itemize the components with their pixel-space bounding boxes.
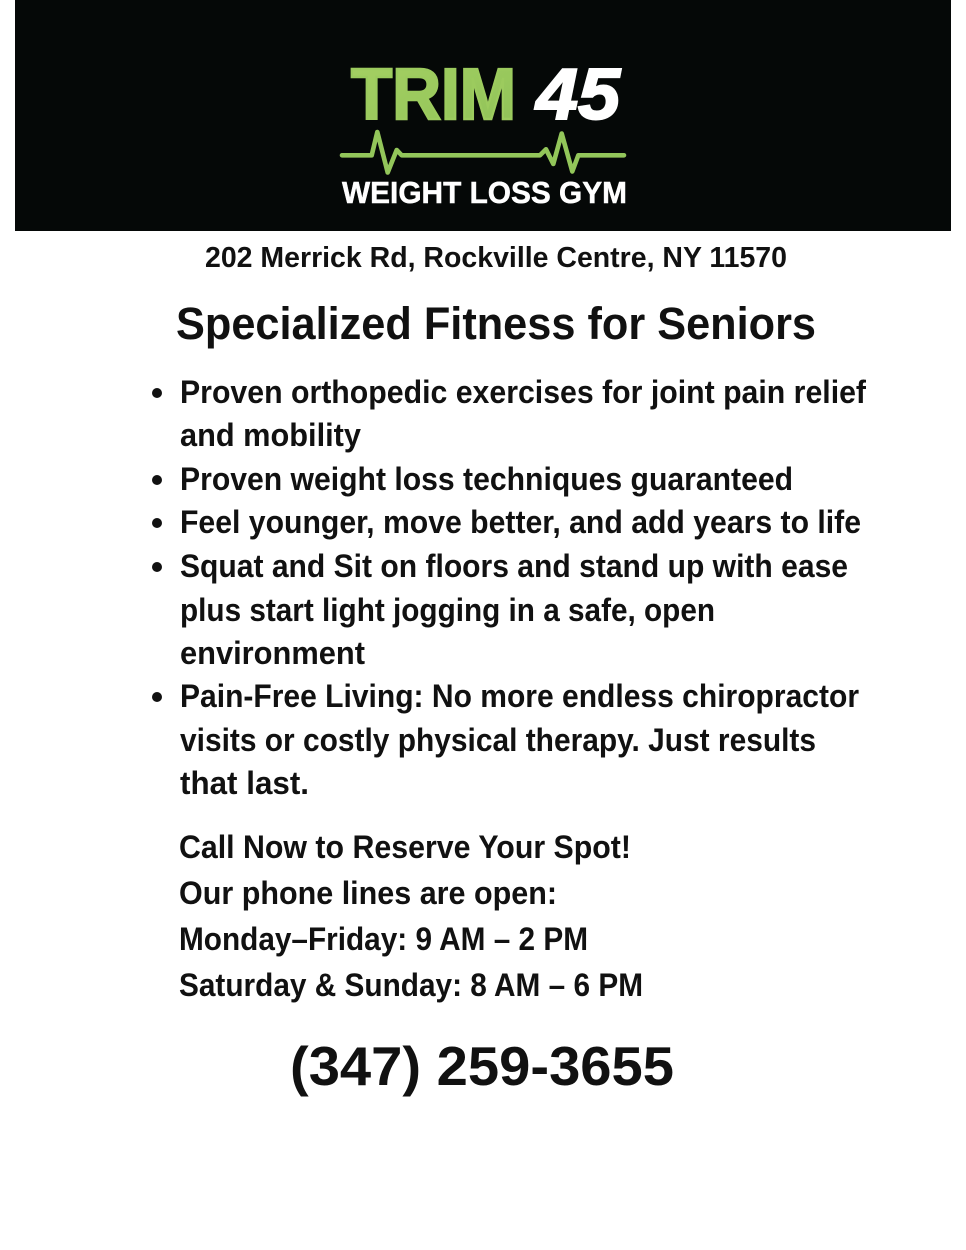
address: 202 Merrick Rd, Rockville Centre, NY 11570: [205, 242, 787, 274]
bullet 5: [152, 678, 859, 801]
call to action and hours: Call Now to Reserve Your Spot!: [179, 829, 631, 865]
bullet 1: [152, 374, 866, 453]
bullet 1: Proven orthopedic exercises for joint pain relief: [180, 374, 866, 410]
bullet 2: Proven weight loss techniques guaranteed: [180, 461, 793, 497]
bullet 4: [152, 548, 848, 671]
bullet 3: Feel younger, move better, and add years to life: [180, 504, 861, 540]
heading: Specialized Fitness for Seniors: [176, 298, 816, 349]
bullet 1: and mobility: [180, 417, 361, 453]
bullet 4: plus start light jogging in a safe, open: [180, 592, 715, 628]
bullet 5: visits or costly physical therapy. Just results: [180, 722, 816, 758]
phone number: (347) 259-3655: [290, 1035, 674, 1097]
benefits list: [152, 374, 866, 801]
call to action and hours: Saturday & Sunday: 8 AM – 6 PM: [179, 967, 643, 1003]
logo: weight loss gym: WEIGHT LOSS GYM: [342, 175, 627, 210]
call to action and hours: Monday–Friday: 9 AM – 2 PM: [179, 921, 588, 957]
logo: 45: 45: [534, 55, 621, 135]
bullet 5: that last.: [180, 765, 309, 801]
bullet 4: Squat and Sit on floors and stand up with ease: [180, 548, 848, 584]
call to action and hours: Our phone lines are open:: [179, 875, 557, 911]
header banner: [15, 0, 951, 231]
icon: heartbeat line: [342, 132, 624, 172]
call to action and hours: [179, 829, 643, 1003]
bullet 4: environment: [180, 635, 365, 671]
bullet 5: Pain-Free Living: No more endless chiropractor: [180, 678, 859, 714]
logo: TRIM: TRIM: [351, 55, 516, 135]
